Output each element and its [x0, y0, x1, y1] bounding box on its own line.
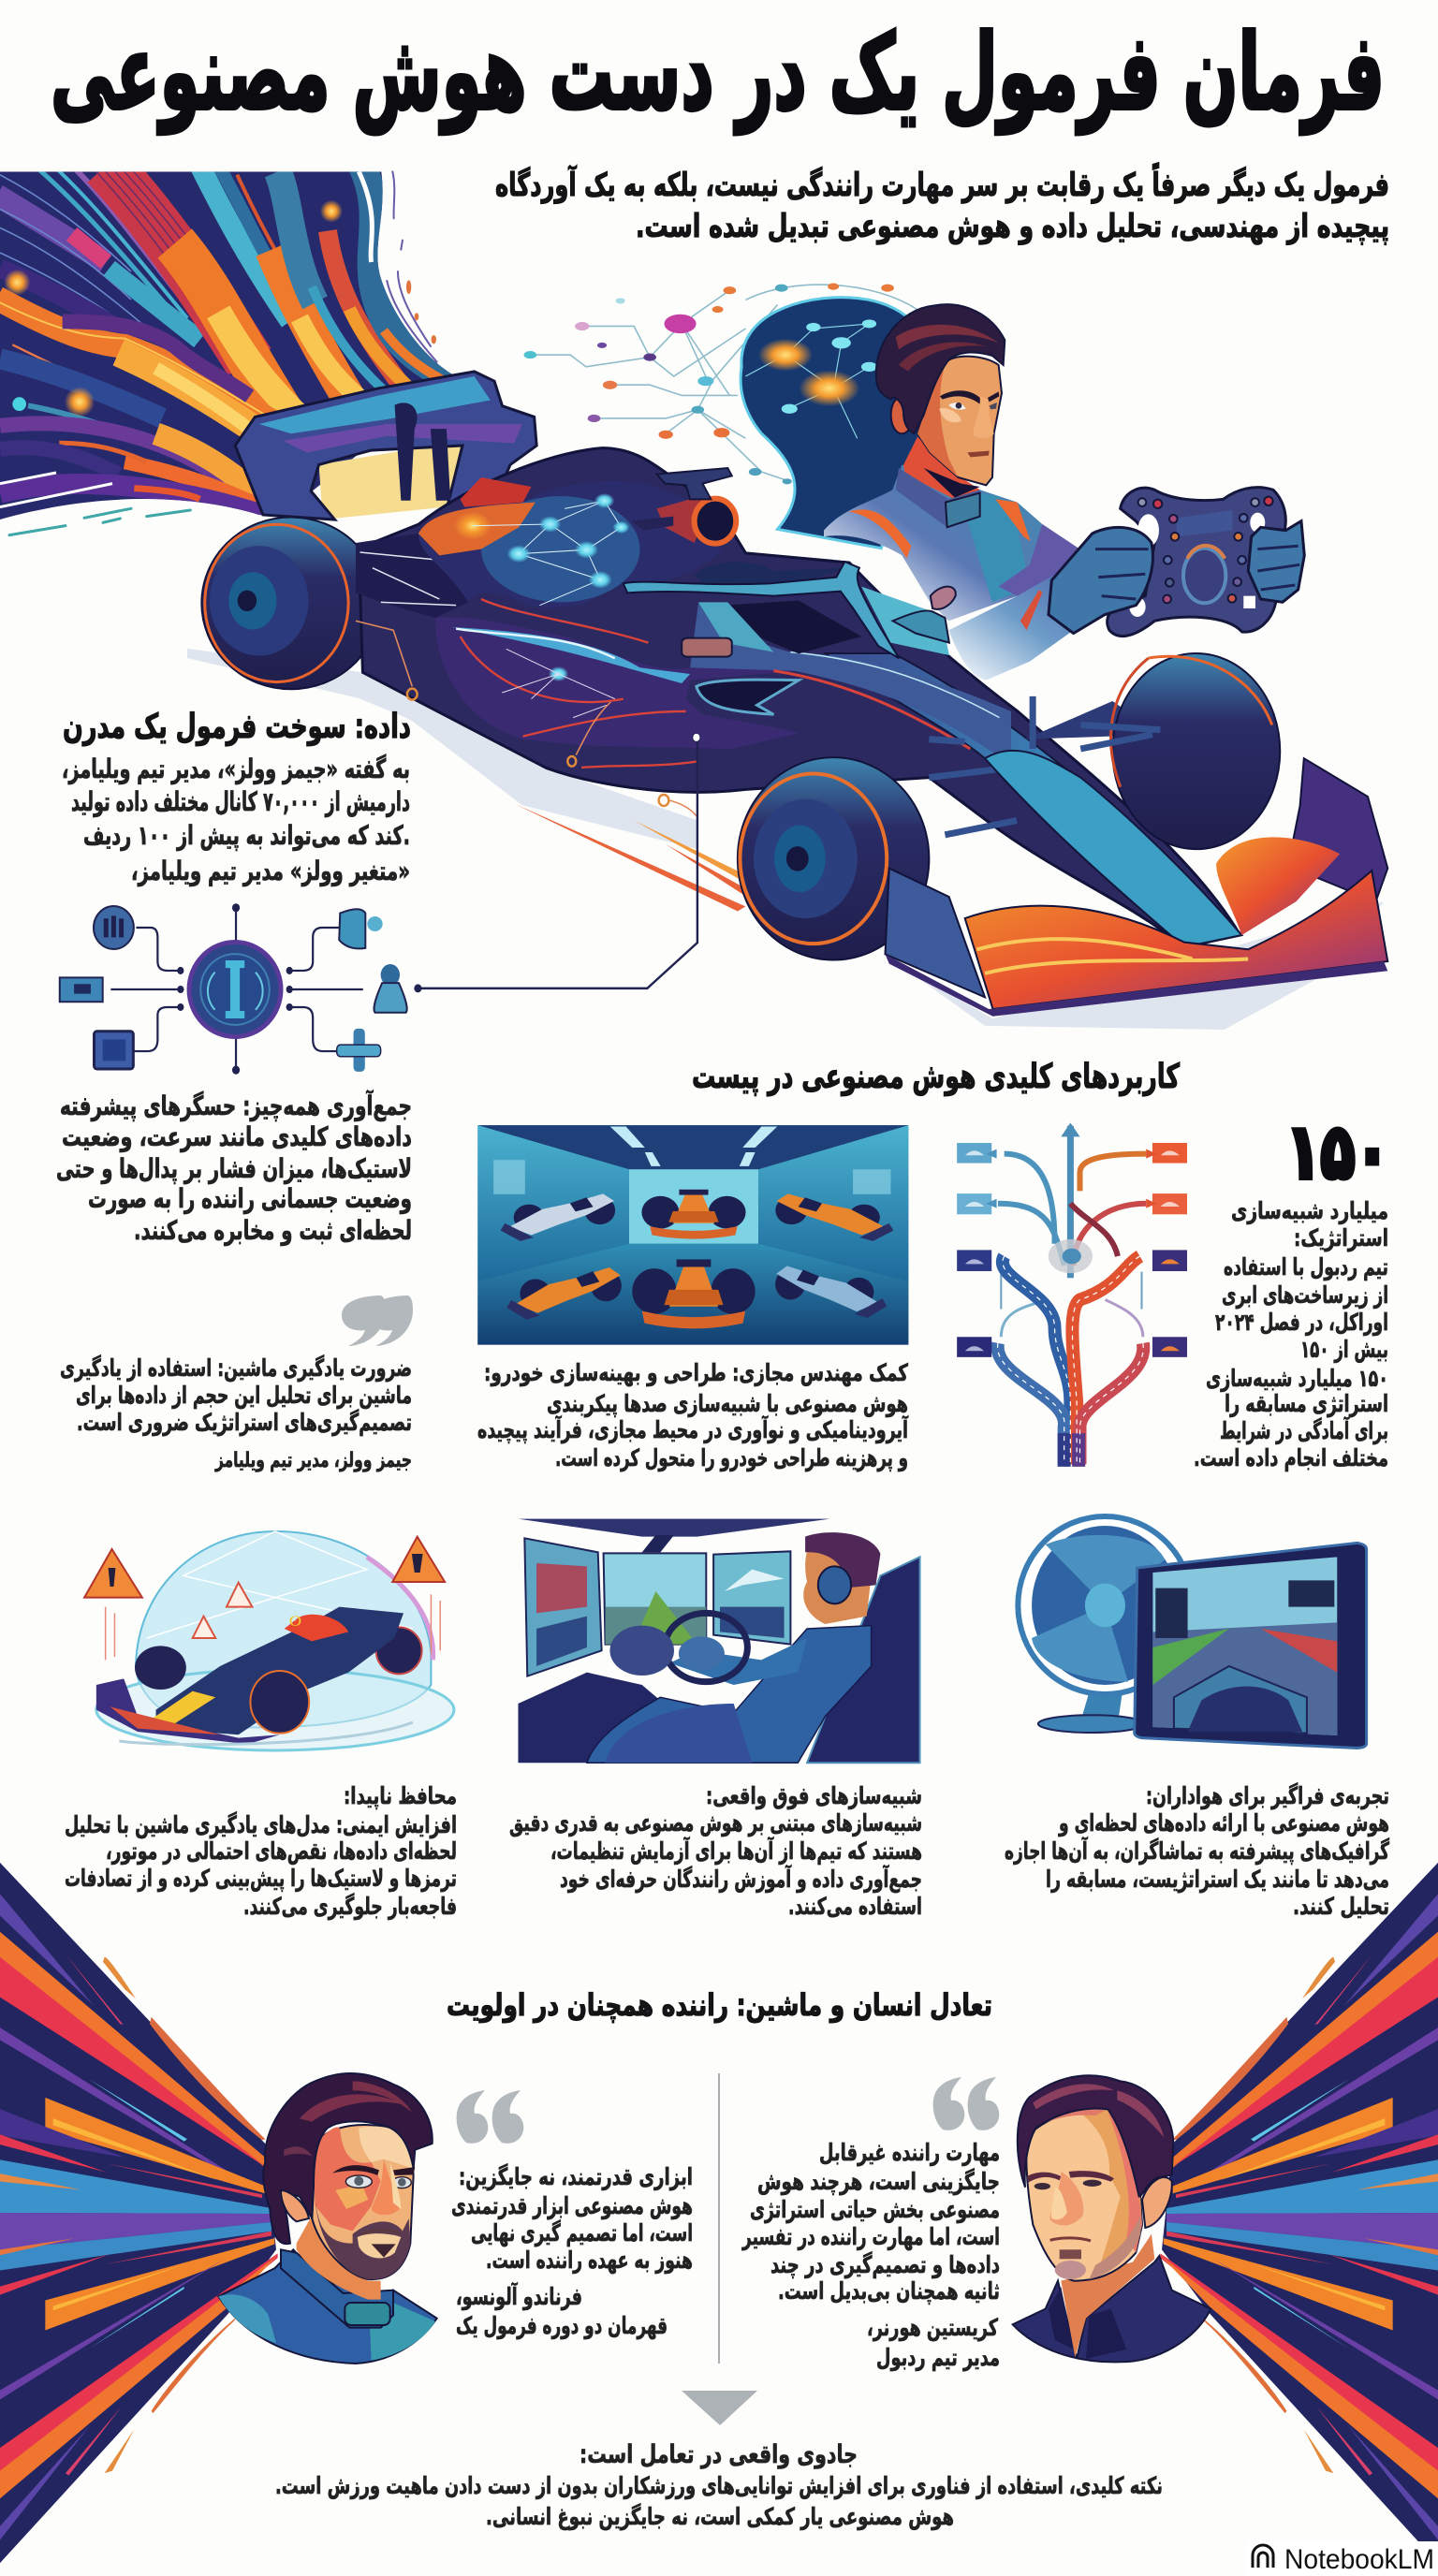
text: conclusion: هوش مصنوعی یار کمکی است، نه جایگزین نبوغ انسانی. [486, 2503, 954, 2531]
left speed rays [0, 1863, 278, 2563]
ground shadows and network [187, 284, 1384, 1030]
subtitle [495, 162, 1389, 245]
forearm [948, 571, 1105, 681]
text: immersive fan experience: تحلیل کنند. [1293, 1893, 1389, 1920]
tablet [1135, 1543, 1367, 1748]
driver body [587, 1626, 872, 1763]
main roads [998, 1256, 1143, 1467]
orange sensor rings [407, 689, 668, 806]
text: Horner quote: است، اما مهارت راننده در تفسیر [741, 2223, 1000, 2251]
divider line [718, 2073, 720, 2364]
dome [136, 1531, 431, 1727]
text: Horner quote: داده‌ها و تصمیم‌گیری در چند [770, 2251, 1000, 2279]
text: 150 billion simulations: استراتژیک: [1294, 1224, 1388, 1252]
text: Alonso quote: فرناندو آلونسو، [456, 2282, 582, 2311]
stat: 150: ۱۵۰ [1286, 1108, 1389, 1195]
halo and cockpit [695, 562, 844, 593]
text: Alonso quote: قهرمان دو دوره فرمول یک [456, 2312, 668, 2340]
icon: central sensor [189, 943, 281, 1037]
arrow: grey down triangle [682, 2391, 757, 2425]
text: Horner quote: جایگزینی است، هرچند هوش [757, 2168, 1000, 2196]
text: collect everything: داده‌های کلیدی مانند سرعت، وضعیت [62, 1121, 412, 1152]
text: 150 billion simulations: بیش از ۱۵۰ [1300, 1336, 1388, 1363]
steering wheel [1108, 488, 1285, 637]
thin branch roads [998, 1126, 1146, 1337]
image: virtual wind tunnel room [477, 1125, 908, 1345]
text: hyper-real simulators: هستند که تیم‌ها از آن‌ها برای آزمایش تنظیمات، [550, 1837, 922, 1866]
text: Alonso quote: است، اما تصمیم گیری نهایی [471, 2219, 693, 2247]
icon: right quote mark [933, 2077, 999, 2130]
heading: data fuel: داده: سوخت فرمول یک مدرن [63, 708, 411, 746]
icon: brake caliper [339, 909, 383, 948]
text: Horner quote: مدیر تیم ردبول [876, 2344, 1000, 2372]
front tyres and front wing [738, 653, 1387, 1017]
text: data intro: .کند که می‌تواند به پیش از ۱۰۰ ردیف [83, 820, 410, 851]
text: invisible guardian: لحظه‌ای داده‌ها، نقص‌های احتمالی در موتور، [106, 1837, 457, 1866]
text: Alonso quote: هوش مصنوعی ابزار قدرتمندی [451, 2192, 693, 2220]
strategy road tree diagram [957, 1122, 1187, 1467]
text: hyper-real simulators: شبیه‌سازهای مبتنی بر هوش مصنوعی به قدری دقیق [509, 1809, 922, 1837]
text: data intro: دارمیش از ۷۰,۰۰۰ کانال مختلف داده تولید [71, 786, 410, 817]
text: data intro: به گفته «جیمز وولز»، مدیر تیم ویلیامز، [62, 754, 410, 784]
hero illustration: car and driver [187, 284, 1387, 1030]
text: hyper-real simulators: استفاده می‌کنند. [788, 1893, 922, 1920]
text: Horner quote: کریستین هورنر، [867, 2314, 998, 2342]
road centre dashes [998, 1256, 1143, 1464]
sensor hub diagram [60, 903, 407, 1075]
text: Horner quote: مصنوعی بخش حیاتی استراتژی [750, 2196, 1000, 2224]
icon: gauge [94, 906, 134, 949]
driver head [803, 1534, 873, 1624]
text: virtual engineering assistant: هوش مصنوعی با شبیه‌سازی صدها پیکربندی [547, 1390, 908, 1418]
text: machine learning quote: جیمز وولز، مدیر تیم ویلیامز [214, 1449, 412, 1472]
rear tyre and wing [201, 372, 1241, 947]
image: invisible safety shield [84, 1531, 454, 1750]
text: hyper-real simulators: جمع‌آوری داده و آموزش رانندگان حرفه‌ای خود [560, 1865, 922, 1894]
text: Horner quote [741, 2139, 1000, 2372]
text: Alonso quote: هنوز به عهده راننده است. [486, 2247, 693, 2275]
sensor connector line from car [415, 733, 700, 992]
text: invisible guardian: محافظ ناپیدا: [344, 1782, 457, 1809]
text: 150 billion simulations [1194, 1197, 1388, 1471]
text: collect everything [56, 1090, 412, 1246]
text: immersive fan experience [1005, 1782, 1389, 1920]
text: machine learning quote [60, 1354, 412, 1472]
text: machine learning quote: ضرورت یادگیری ماشین: استفاده از یادگیری [60, 1354, 412, 1383]
text: invisible guardian: افزایش ایمنی: مدل‌های یادگیری ماشین با تحلیل [65, 1811, 457, 1839]
warning triangles [84, 1537, 445, 1638]
text: invisible guardian: ترمزها و لاستیک‌ها را پیش‌بینی کرده و از تصادفات [65, 1865, 457, 1893]
text: virtual engineering assistant: کمک مهندس مجازی: طراحی و بهینه‌سازی خودرو: [484, 1359, 908, 1387]
icon: driver body sensor [374, 964, 407, 1013]
portrait: Fernando Alonso [218, 2073, 437, 2364]
desk fan [1018, 1516, 1192, 1733]
icon: wheel sensor [337, 1029, 381, 1072]
text: collect everything: وضعیت جسمانی راننده را به صورت [88, 1183, 412, 1214]
text: invisible guardian [65, 1782, 457, 1921]
protected car [96, 1607, 422, 1744]
text: hyper-real simulators: شبیه‌سازهای فوق واقعی: [706, 1782, 922, 1810]
car body details: sidepod, engine cover, halo [356, 468, 1011, 816]
desk [518, 1673, 734, 1763]
text: collect everything: لحظه‌ای ثبت و مخابره می‌کنند. [134, 1215, 412, 1246]
text: Alonso quote [451, 2163, 693, 2340]
vent [697, 680, 799, 714]
right speed rays [1160, 1863, 1438, 2563]
seat [807, 1557, 920, 1763]
airbox [695, 499, 736, 544]
text: 150 billion simulations: میلیارد شبیه‌سازی [1231, 1197, 1388, 1224]
image: hyper-real simulator [518, 1519, 920, 1763]
text: machine learning quote: تصمیم‌گیری‌های استراتژیک ضروری است. [77, 1409, 412, 1437]
sidepod swirl [452, 627, 690, 683]
speed streak artwork top left [0, 166, 487, 543]
text: virtual engineering assistant [477, 1359, 909, 1472]
steering wheel [665, 1613, 747, 1682]
text: collect everything: جمع‌آوری همه‌چیز: حسگرهای پیشرفته [60, 1090, 412, 1121]
text: Alonso quote: ابزاری قدرتمند، نه جایگزین: [459, 2163, 693, 2191]
icon: camera [60, 977, 103, 1002]
engine to nose top [690, 602, 1011, 765]
text: invisible guardian: فاجعه‌بار جلوگیری می‌کنند. [243, 1893, 457, 1921]
portrait: Christian Horner [1013, 2075, 1211, 2362]
text: virtual engineering assistant: و پرهزینه طراحی خودرو را متحول کرده است. [555, 1444, 908, 1472]
heading: human and machine balance: تعادل انسان و ماشین: راننده همچنان در اولویت [447, 1987, 992, 2023]
mirror and pod [893, 610, 949, 643]
text: data intro [62, 754, 410, 886]
brain head silhouette [741, 298, 932, 549]
text: data intro: «متغیر وولز» مدیر تیم ویلیامز، [131, 856, 410, 886]
text: Horner quote: مهارت راننده غیرقابل [819, 2139, 1000, 2167]
icon: left quote mark [457, 2090, 523, 2144]
text: machine learning quote: ماشین برای تحلیل این حجم از داده‌ها برای [76, 1382, 412, 1410]
text: conclusion [275, 2440, 1163, 2531]
heading: key AI applications: کاربردهای کلیدی هوش مصنوعی در پیست [692, 1058, 1180, 1096]
gloves [1049, 527, 1152, 634]
screens [524, 1538, 602, 1676]
icon: grey quote mark [342, 1295, 413, 1346]
destination squares [957, 1143, 1187, 1357]
driver and steering wheel [824, 304, 1304, 681]
icon: chip [95, 1032, 133, 1069]
text: virtual engineering assistant: آیرودینامیکی و نوآوری در محیط مجازی، فرآیند پیچیده [477, 1415, 909, 1444]
text: hyper-real simulators [509, 1782, 922, 1920]
text: conclusion: جادوی واقعی در تعامل است: [580, 2440, 858, 2469]
text: 150 billion simulations: ۱۵۰ میلیارد شبیه‌سازی [1206, 1365, 1388, 1392]
image: fan tablet experience [1018, 1516, 1367, 1748]
text: collect everything: لاستیک‌ها، میزان فشار بر پدال‌ها و حتی [56, 1153, 412, 1184]
text: Horner quote: ثانیه همچنان بی‌بدیل است. [778, 2277, 1000, 2305]
